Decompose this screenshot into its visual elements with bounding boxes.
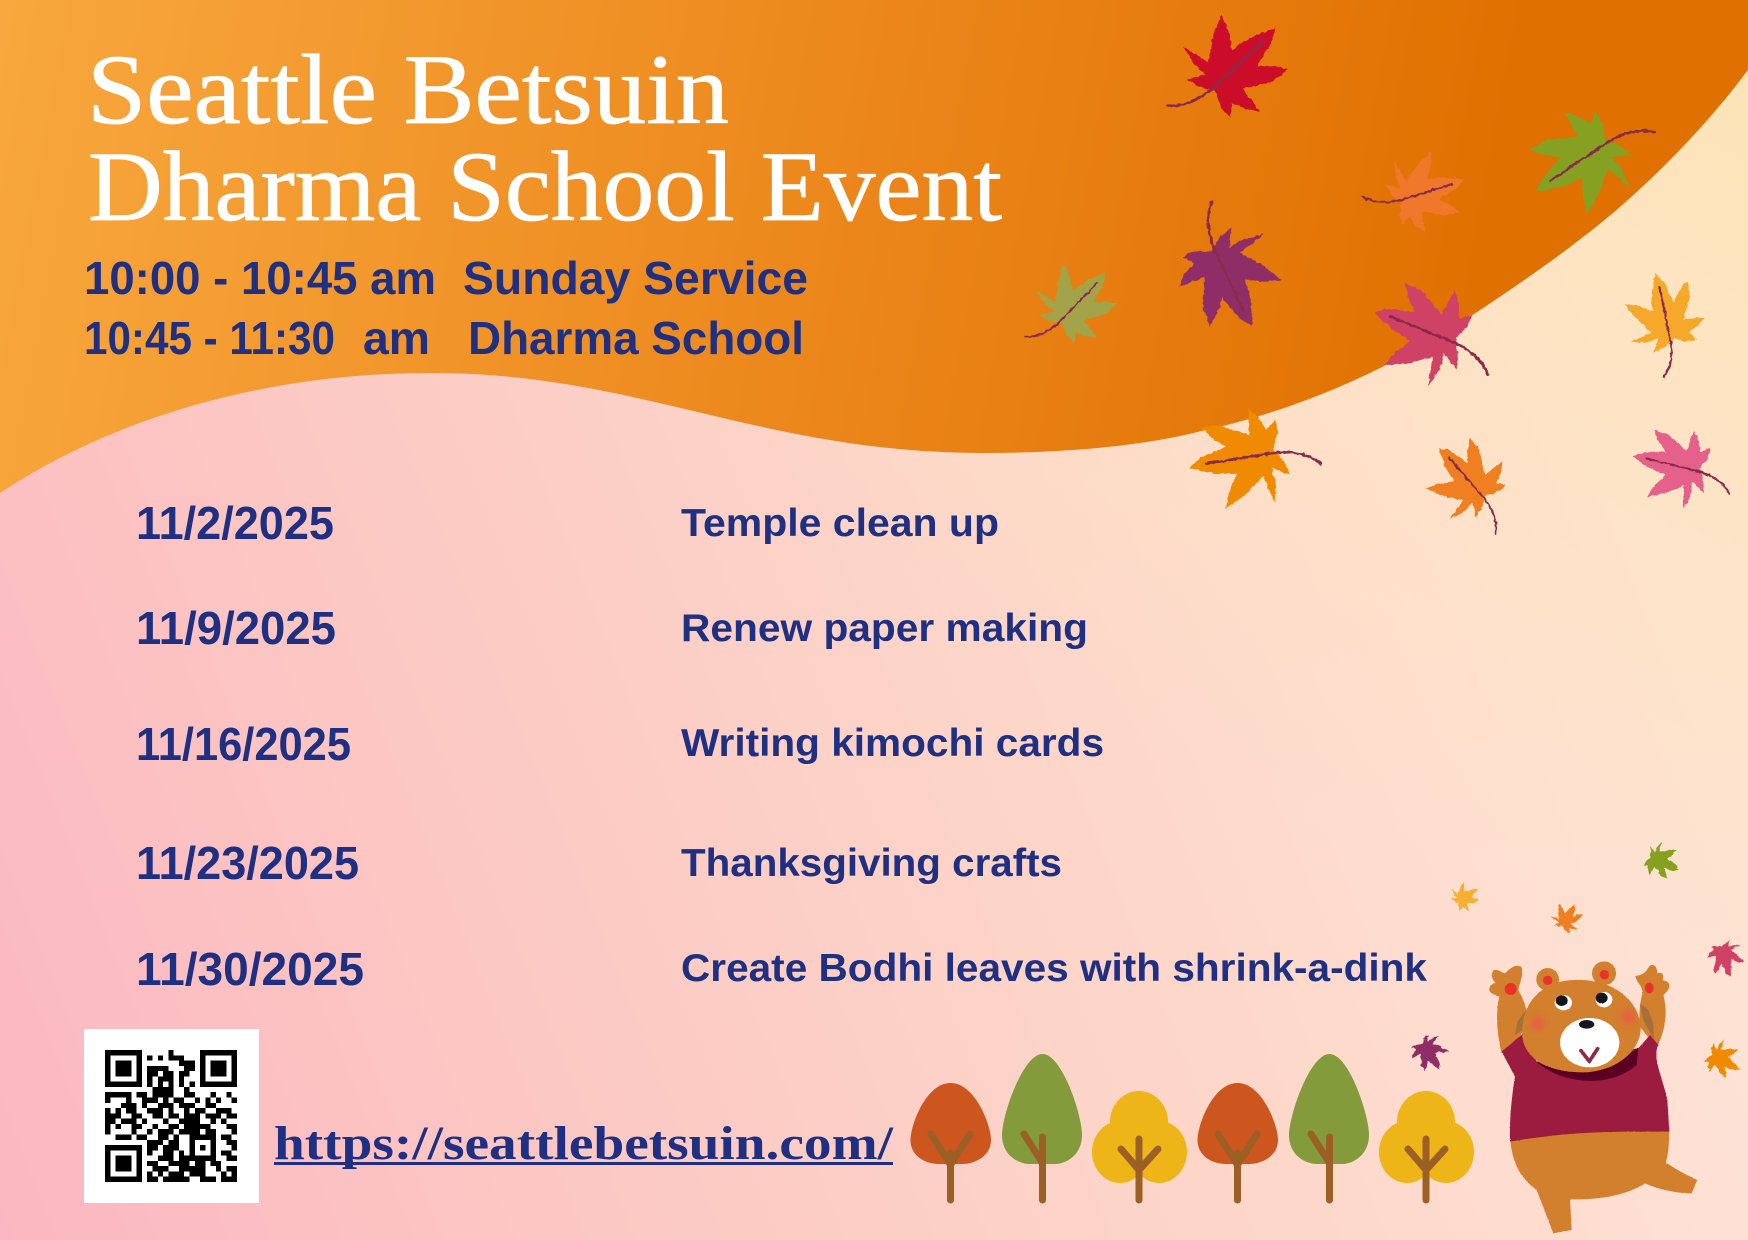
icon: red leaf bbox=[1167, 15, 1288, 117]
row: 11/9: Renew paper making bbox=[681, 607, 1088, 650]
icon: pink leaf bbox=[1619, 410, 1737, 532]
bear nose bbox=[1579, 1020, 1594, 1029]
bear collar bbox=[1536, 1047, 1638, 1081]
icon: purple leaf bbox=[1165, 198, 1298, 343]
bear paw pads bbox=[1505, 983, 1654, 995]
schedule times: Sunday Service bbox=[463, 252, 808, 304]
icon: faint orange leaf bbox=[1359, 133, 1478, 246]
bear arm shade bbox=[1515, 1003, 1654, 1040]
bear head bbox=[1522, 980, 1641, 1072]
bear sweater bbox=[1502, 1033, 1669, 1142]
row: 11/2: 11/2/2025 bbox=[136, 497, 334, 549]
icon: orange tree bbox=[910, 1083, 991, 1200]
row: 11/30: 11/30/2025 bbox=[136, 943, 364, 995]
icon: yellow tree 2 bbox=[1379, 1091, 1474, 1200]
bear ears bbox=[1536, 961, 1616, 991]
bear arms and hands bbox=[1489, 965, 1669, 1053]
icon: tangerine leaf bbox=[1425, 437, 1508, 534]
icon: green tree 2 bbox=[1289, 1054, 1369, 1200]
bear eyes bbox=[1555, 992, 1612, 1010]
small leaves around bear bbox=[1408, 837, 1748, 1082]
icon: small orange leaf bbox=[1548, 899, 1586, 937]
row: 11/2 bbox=[136, 497, 999, 549]
falling maple leaves bbox=[1022, 15, 1737, 538]
icon: green tree bbox=[1002, 1054, 1082, 1200]
illustration: bear bbox=[1489, 961, 1697, 1233]
row: 11/16: 11/16/2025 bbox=[136, 718, 351, 770]
event list bbox=[136, 497, 1427, 995]
row: 11/9 bbox=[136, 602, 1088, 654]
row: 11/23 bbox=[136, 837, 1062, 889]
bear cheeks bbox=[1530, 1009, 1636, 1031]
row: 11/30: Create Bodhi leaves with shrink-a-dink bbox=[681, 947, 1427, 990]
icon: small orange leaf 2 bbox=[1700, 1036, 1745, 1082]
schedule times: am bbox=[363, 312, 430, 364]
bear muzzle bbox=[1560, 1018, 1619, 1067]
schedule times: Dharma School bbox=[468, 312, 804, 364]
icon: yellow leaf bbox=[1603, 259, 1720, 381]
title bbox=[87, 34, 1002, 242]
title: Seattle Betsuin bbox=[87, 34, 729, 145]
icon: crimson leaf bbox=[1356, 263, 1498, 414]
bear mouth bbox=[1581, 1049, 1598, 1061]
row: 11/30 bbox=[136, 943, 1427, 995]
row: 11/9: 11/9/2025 bbox=[136, 602, 336, 654]
orange wave header bbox=[0, 0, 1748, 493]
website link: https://seattlebetsuin.com/ bbox=[274, 1117, 894, 1170]
icon: small yellow leaf bbox=[1448, 880, 1482, 914]
schedule times: 10:00 - 10:45 am bbox=[84, 252, 436, 304]
icon: small crimson leaf bbox=[1700, 932, 1748, 983]
QR code bbox=[84, 1029, 259, 1203]
row: 11/16 bbox=[136, 718, 1104, 770]
row: 11/23: 11/23/2025 bbox=[136, 837, 359, 889]
icon: orange tree 2 bbox=[1198, 1083, 1278, 1200]
row: 11/23: Thanksgiving crafts bbox=[681, 842, 1062, 885]
icon: green leaf bbox=[1521, 102, 1657, 222]
row: 11/2: Temple clean up bbox=[681, 502, 999, 545]
icon: orange leaf bbox=[1171, 388, 1327, 538]
icon: small purple leaf bbox=[1408, 1031, 1451, 1075]
tree row bbox=[910, 1054, 1474, 1200]
icon: olive leaf bbox=[1022, 261, 1120, 346]
icon: small green leaf bbox=[1638, 837, 1685, 885]
row: 11/16: Writing kimochi cards bbox=[681, 722, 1104, 765]
bear belly and legs bbox=[1510, 1107, 1697, 1233]
schedule times bbox=[84, 252, 808, 364]
schedule times: 10:45 - 11:30 bbox=[84, 312, 335, 364]
title: Dharma School Event bbox=[88, 131, 1002, 242]
icon: yellow tree bbox=[1092, 1091, 1187, 1200]
